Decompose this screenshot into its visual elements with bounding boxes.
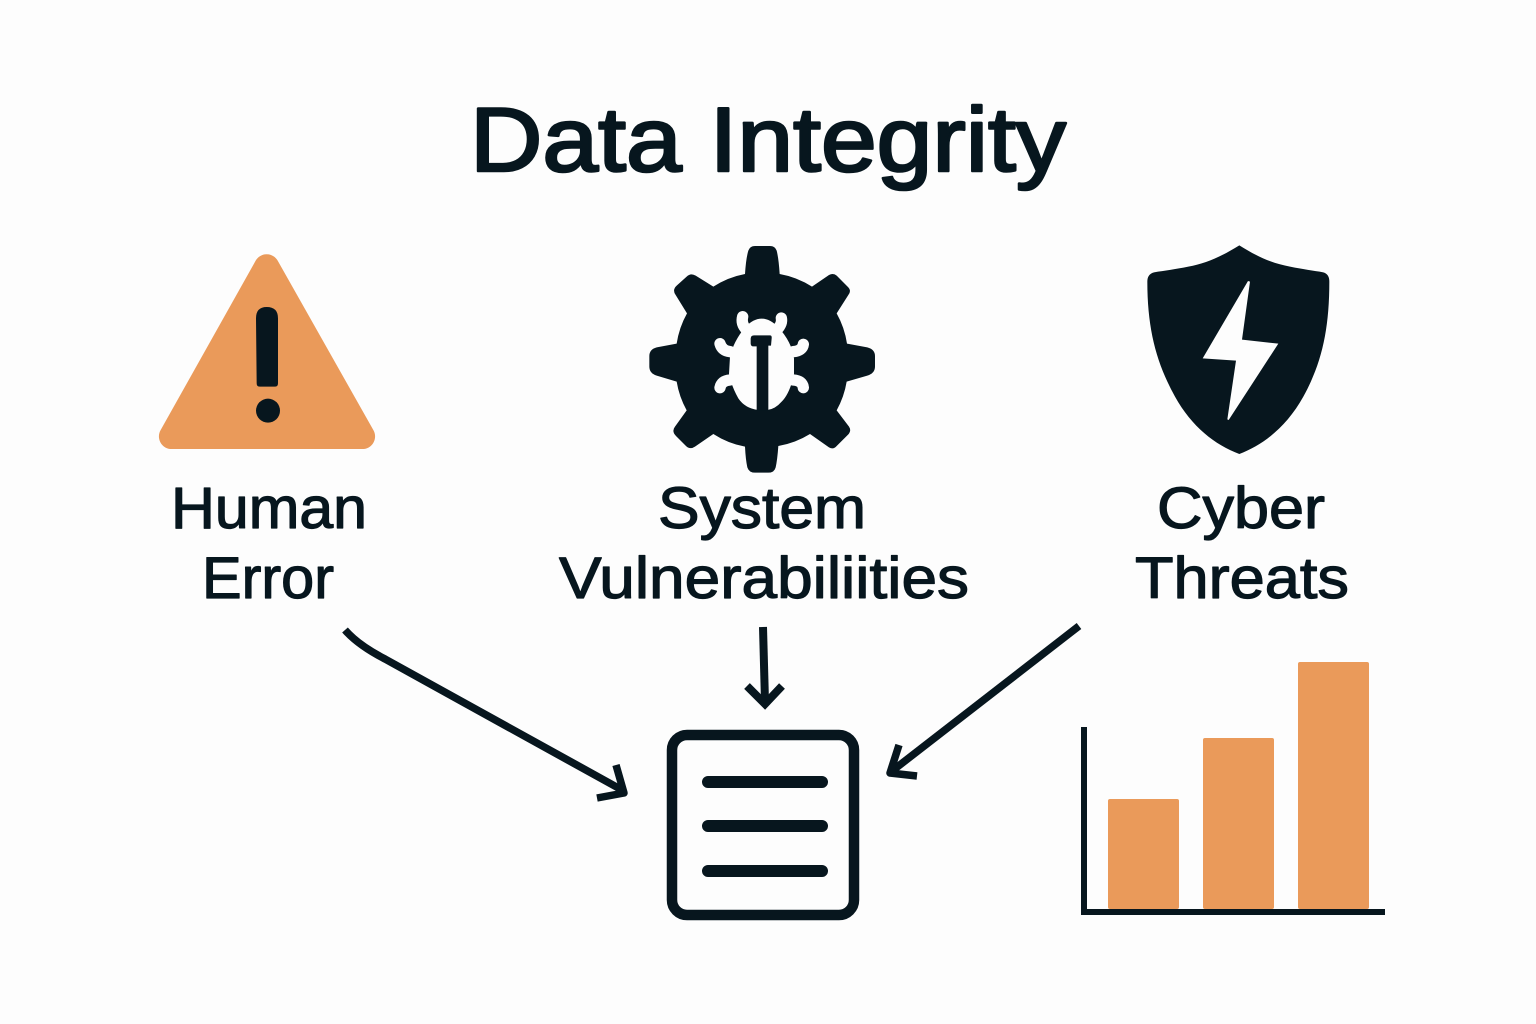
bug body [720, 317, 803, 410]
label: system vulnerabilities [559, 476, 969, 611]
icon: gear with bug [649, 246, 875, 473]
icon: document [672, 735, 854, 915]
label: cyber threats: Cyber [1157, 476, 1325, 541]
arrow: cyber threats to document [890, 626, 1079, 776]
arrow: human error to document [345, 630, 624, 798]
bar 2 [1203, 738, 1274, 909]
label: human error: Human [171, 476, 367, 541]
bar chart [1084, 662, 1385, 912]
icon: shield with lightning bolt [1147, 245, 1329, 454]
label: human error: Error [202, 546, 334, 611]
label: cyber threats: Threats [1135, 546, 1349, 611]
title: Data Integrity [470, 90, 1067, 191]
label: human error [171, 476, 367, 611]
bar 1 [1108, 799, 1179, 909]
label: system vulnerabilities: System [658, 476, 866, 541]
icon: warning triangle [159, 254, 375, 449]
label: cyber threats [1135, 476, 1349, 611]
arrow: system vulnerabilities to document [747, 627, 782, 704]
chart axes [1084, 727, 1385, 912]
bar 3 [1298, 662, 1369, 909]
label: system vulnerabilities: Vulnerabiliities [559, 546, 969, 611]
